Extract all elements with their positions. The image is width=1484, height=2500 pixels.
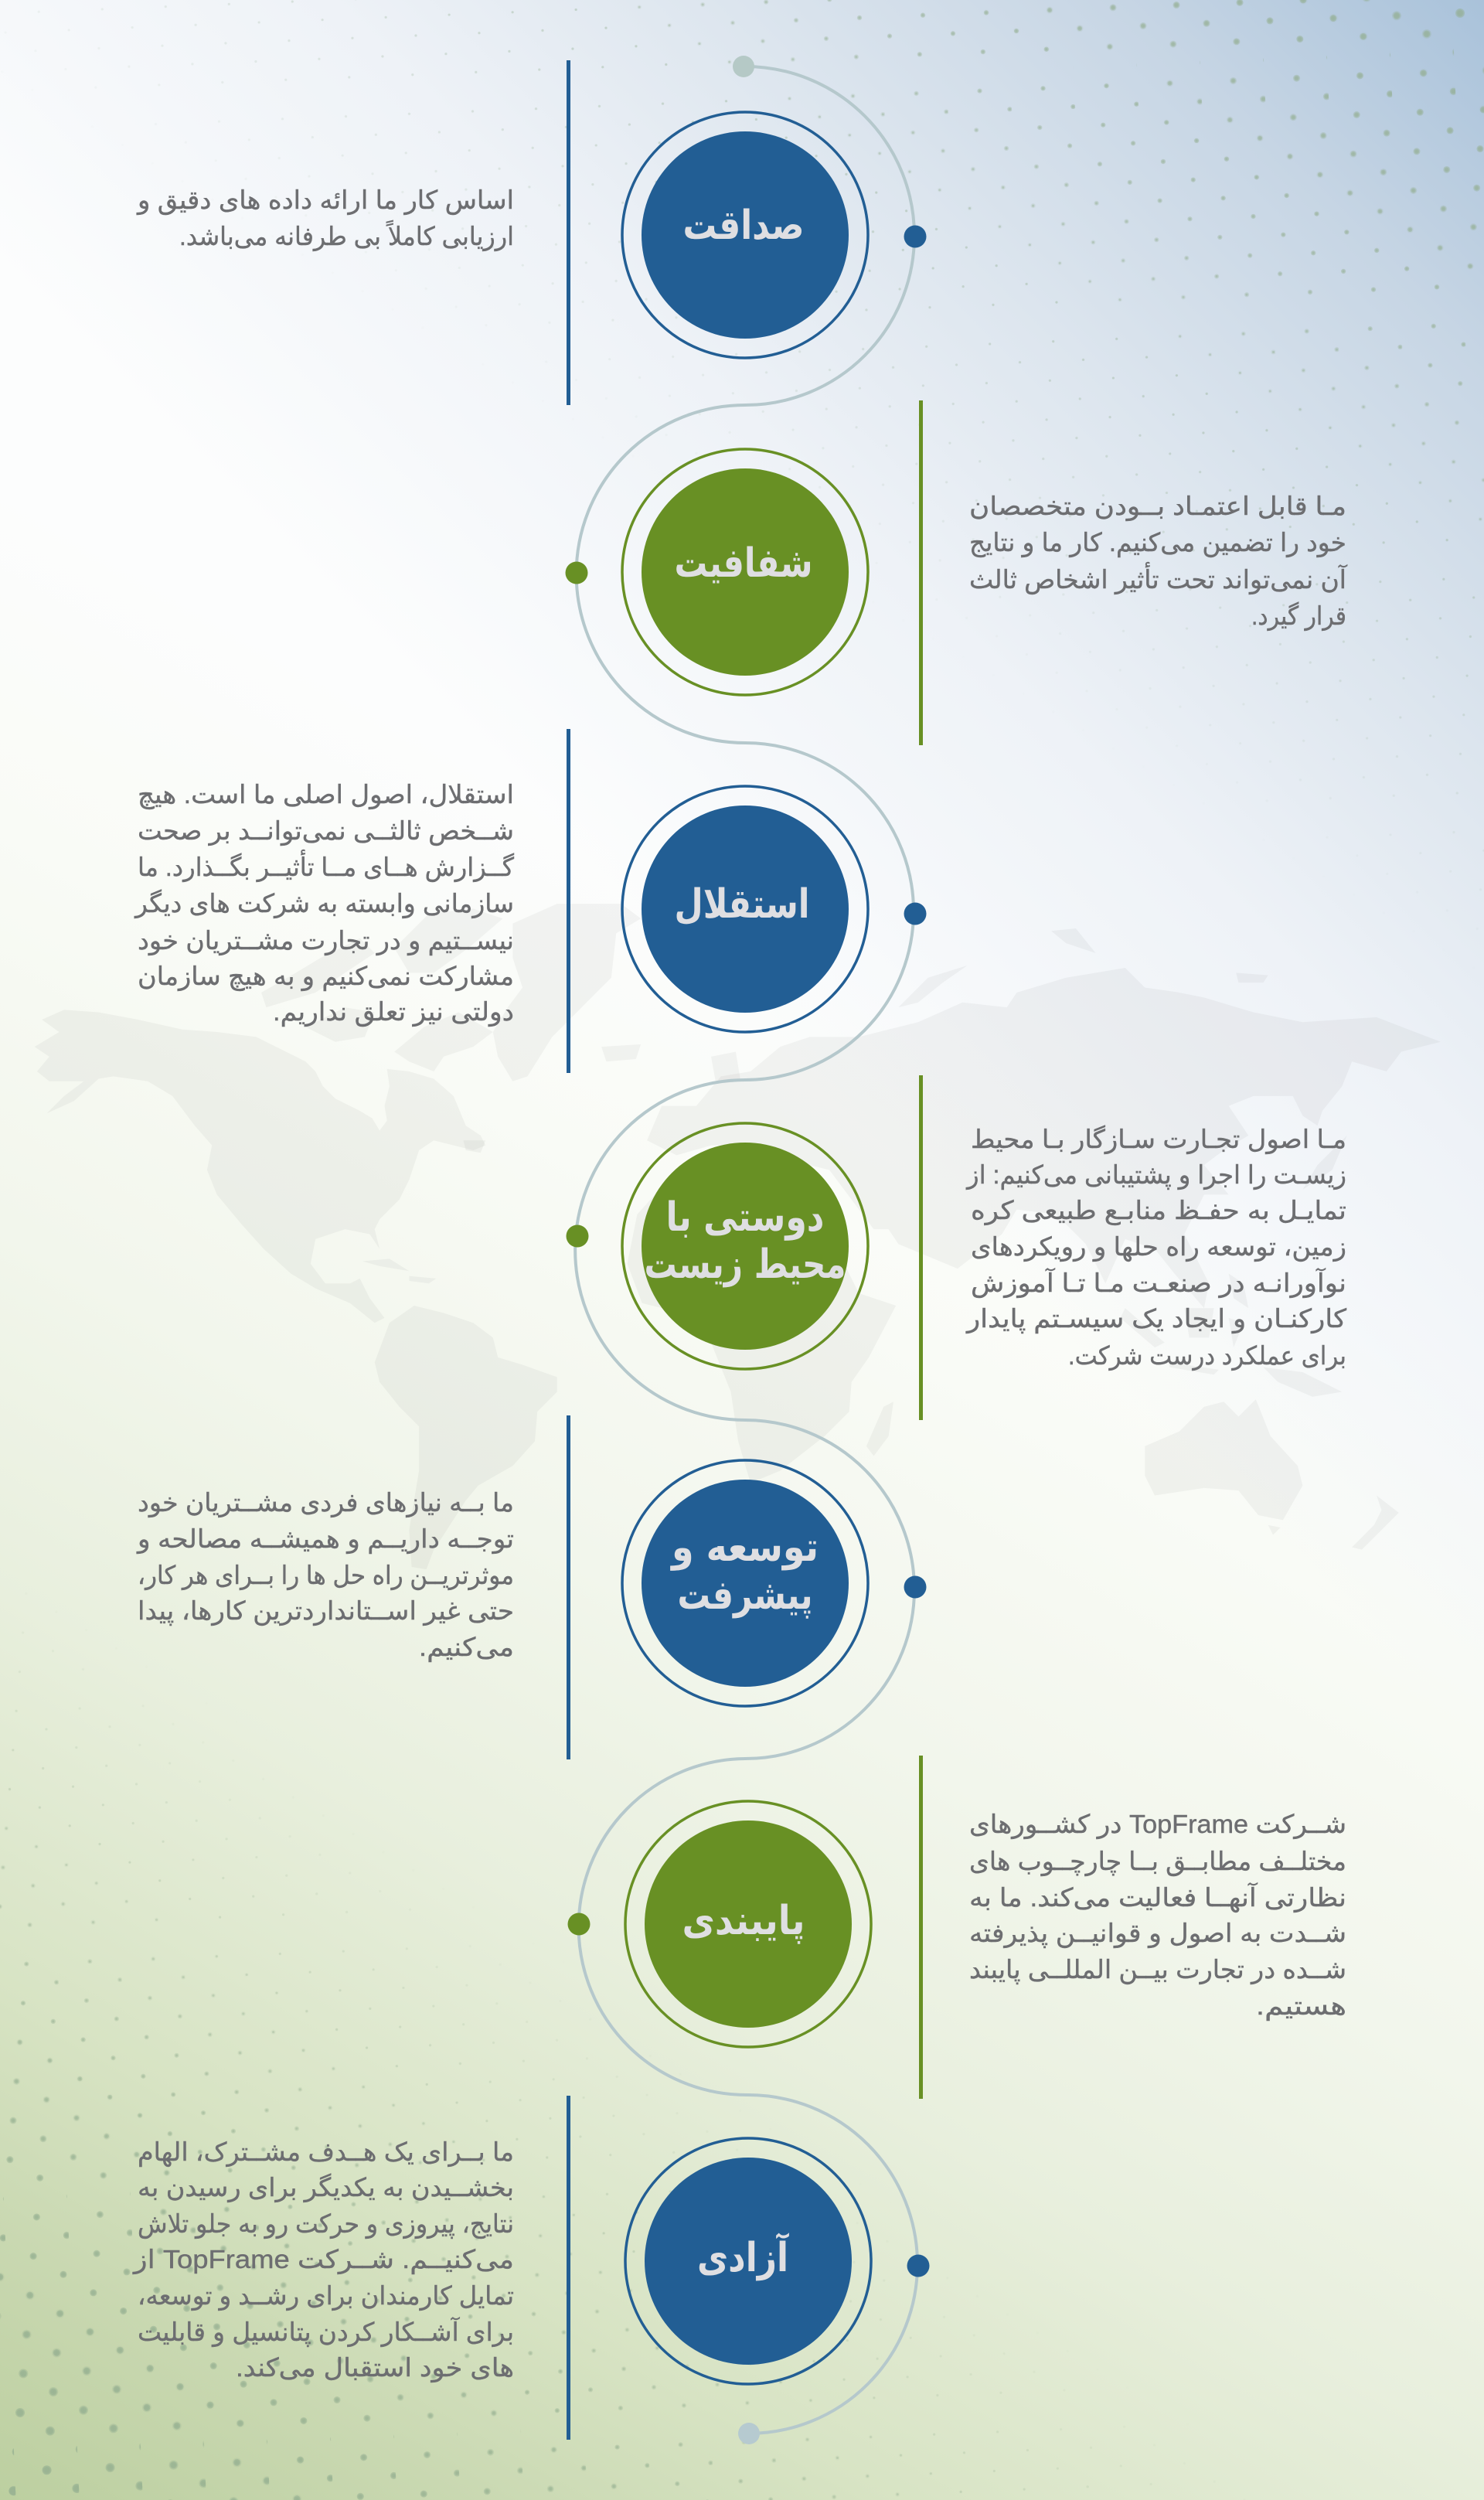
- title: [645, 1194, 846, 1288]
- description: خود را تضمین می‌کنیم. کار ما و نتایج: [969, 528, 1346, 557]
- title: دوستی با: [666, 1194, 824, 1241]
- ring: [622, 786, 868, 1032]
- description: نیســتیم و در تجارت مشــتریان خود: [138, 926, 514, 955]
- description: زیسـت را اجرا و پشتیبانی می‌کنیم: از: [965, 1160, 1346, 1190]
- description: موثرتریــن راه حل ها را بــرای هر کار،: [138, 1561, 514, 1590]
- title: توسعه و: [669, 1524, 819, 1571]
- ring: [625, 1801, 871, 2047]
- description: مختلــف مطابــق بــا چارچــوب های: [969, 1847, 1346, 1877]
- description: شــده در تجارت بیــن المللــی پایبند: [969, 1955, 1346, 1984]
- description: کارکنـان و ایجاد یک سیسـتم پایدار: [965, 1304, 1346, 1333]
- title: [669, 1524, 819, 1619]
- description: ارزیابی کاملاً بی طرفانه می‌باشد.: [179, 220, 514, 251]
- description: شــدت به اصول و قوانیــن پذیرفته: [969, 1919, 1346, 1948]
- description: استقلال، اصول اصلی ما است. هیچ: [138, 780, 514, 809]
- divider bar: [567, 1415, 570, 1759]
- divider bar: [567, 60, 570, 405]
- description: مـا اصول تجـارت سـازگار بـا محیط: [971, 1125, 1346, 1154]
- description: آن نمی‌تواند تحت تأثیر اشخاص ثالث: [969, 562, 1348, 595]
- title: شفافیت: [674, 540, 813, 587]
- description: [969, 492, 1348, 631]
- ring: [622, 112, 868, 358]
- disc: [642, 1480, 849, 1687]
- description: [965, 1125, 1346, 1371]
- title: محیط زیست: [645, 1241, 846, 1288]
- description: مشارکت نمی‌کنیم و به هیچ سازمان: [138, 962, 514, 991]
- description: [134, 780, 514, 1027]
- world map: [35, 904, 1441, 1569]
- ring: [622, 1460, 868, 1706]
- description: تمایل کارمندان برای رشــد و توسعه،: [138, 2281, 514, 2311]
- description: نظارتی آنهــا فعالیت می‌کند. ما به: [969, 1882, 1346, 1912]
- divider bar: [919, 400, 923, 745]
- title: پایبندی: [682, 1898, 805, 1944]
- disc: [645, 1821, 852, 2028]
- description: [969, 1810, 1346, 2021]
- dot pattern: top right: [38, 0, 1484, 891]
- description: ما بــه نیازهای فردی مشــتریان خود: [138, 1488, 514, 1517]
- description: [136, 1488, 514, 1662]
- description: اساس کار ما ارائه داده های دقیق و: [136, 186, 514, 216]
- description: سازمانی وابسته به شرکت های دیگر: [134, 889, 514, 918]
- node: [567, 1912, 591, 1936]
- description: برای عملکرد درست شرکت.: [1068, 1341, 1346, 1371]
- description: نوآورانـه در صنعـت مـا تـا آموزش: [971, 1268, 1346, 1298]
- disc: [642, 131, 849, 339]
- description: دولتی نیز تعلق نداریم.: [273, 997, 514, 1027]
- disc: [642, 806, 849, 1013]
- panel: transparency: [566, 400, 1348, 745]
- ring: [622, 1123, 868, 1369]
- divider bar: [567, 2096, 570, 2440]
- description: قرار گیرد.: [1251, 601, 1346, 631]
- panel: freedom: [132, 2096, 929, 2440]
- node: [566, 561, 587, 584]
- description: گــزارش هــای مــا تأثیــر بگــذارد. ما: [138, 850, 514, 882]
- description: هستیم.: [1256, 1991, 1346, 2021]
- description: توجــه داریــم و همیشــه مصالحه و: [136, 1524, 514, 1554]
- title: پیشرفت: [677, 1572, 813, 1619]
- panel: honesty: [136, 60, 926, 405]
- serpentine connector line: [575, 66, 917, 2434]
- description: شــخص ثالثــی نمی‌توانــد بر صحت: [138, 816, 514, 846]
- title: صداقت: [683, 203, 804, 249]
- node: [566, 1224, 589, 1248]
- node: [907, 2254, 929, 2277]
- divider bar: [919, 1756, 923, 2099]
- disc: [642, 1143, 849, 1350]
- divider bar: [567, 729, 570, 1073]
- description: [136, 186, 514, 251]
- description: های خود استقبال می‌کند.: [236, 2353, 514, 2382]
- description: ما بــرای یک هــدف مشــترک، الهام: [138, 2137, 514, 2167]
- panel: environment friendliness: [566, 1075, 1346, 1420]
- description: می‌کنیم.: [419, 1633, 514, 1662]
- description: برای آشــکار کردن پتانسیل و قابلیت: [138, 2317, 514, 2347]
- panel: independence: [134, 729, 927, 1073]
- disc: [642, 468, 849, 676]
- description: [132, 2137, 514, 2382]
- dot pattern: bottom left: [0, 1632, 1152, 2500]
- panel: commitment: [567, 1756, 1346, 2099]
- description: تمایـل به حفـظ منابـع طبیعی کره: [971, 1196, 1346, 1225]
- description: بخشــیدن به یکدیگر برای رسیدن به: [138, 2173, 514, 2202]
- description: زمین، توسعه راه حلها و رویکردهای: [971, 1232, 1346, 1262]
- description: شــرکت TopFrame در کشــورهای: [969, 1810, 1346, 1839]
- ring: [625, 2138, 871, 2384]
- description: مـا قابل اعتمـاد بــودن متخصصان: [969, 492, 1346, 521]
- title: آزادی: [697, 2233, 789, 2281]
- node: [904, 903, 926, 925]
- description: حتی غیر اســتانداردترین کارها، پیدا: [138, 1596, 514, 1626]
- ring: [622, 449, 868, 695]
- description: می‌کنیــم. شــرکت TopFrame از: [132, 2245, 514, 2274]
- node: [904, 226, 926, 247]
- start node: [733, 56, 754, 77]
- node: [904, 1575, 926, 1599]
- divider bar: [919, 1075, 923, 1420]
- end node: [738, 2423, 760, 2444]
- description: نتایج، پیروزی و حرکت رو به جلو تلاش: [138, 2209, 514, 2239]
- title: استقلال: [674, 881, 810, 928]
- panel: development and progress: [136, 1415, 927, 1759]
- disc: [645, 2158, 852, 2365]
